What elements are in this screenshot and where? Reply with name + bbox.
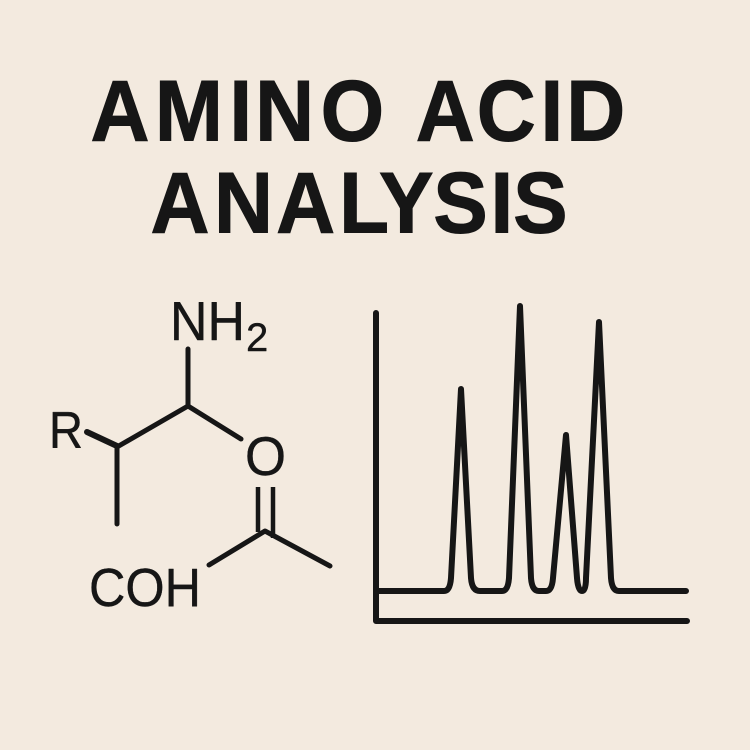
chart axes bbox=[376, 313, 687, 621]
chromatogram peaks bbox=[378, 306, 686, 591]
molecule labels: NH bbox=[170, 290, 245, 352]
molecule labels: O bbox=[245, 425, 286, 487]
molecule bonds bbox=[87, 349, 330, 566]
title bbox=[91, 63, 625, 251]
title: ANALYSIS bbox=[150, 155, 568, 251]
molecule labels bbox=[49, 290, 286, 618]
molecule structure diagram bbox=[49, 290, 330, 618]
molecule labels: R bbox=[49, 402, 83, 460]
molecule labels: COH bbox=[89, 558, 201, 618]
chromatogram chart bbox=[376, 306, 687, 621]
molecule labels: 2 bbox=[246, 316, 268, 360]
title: AMINO ACID bbox=[91, 63, 625, 159]
